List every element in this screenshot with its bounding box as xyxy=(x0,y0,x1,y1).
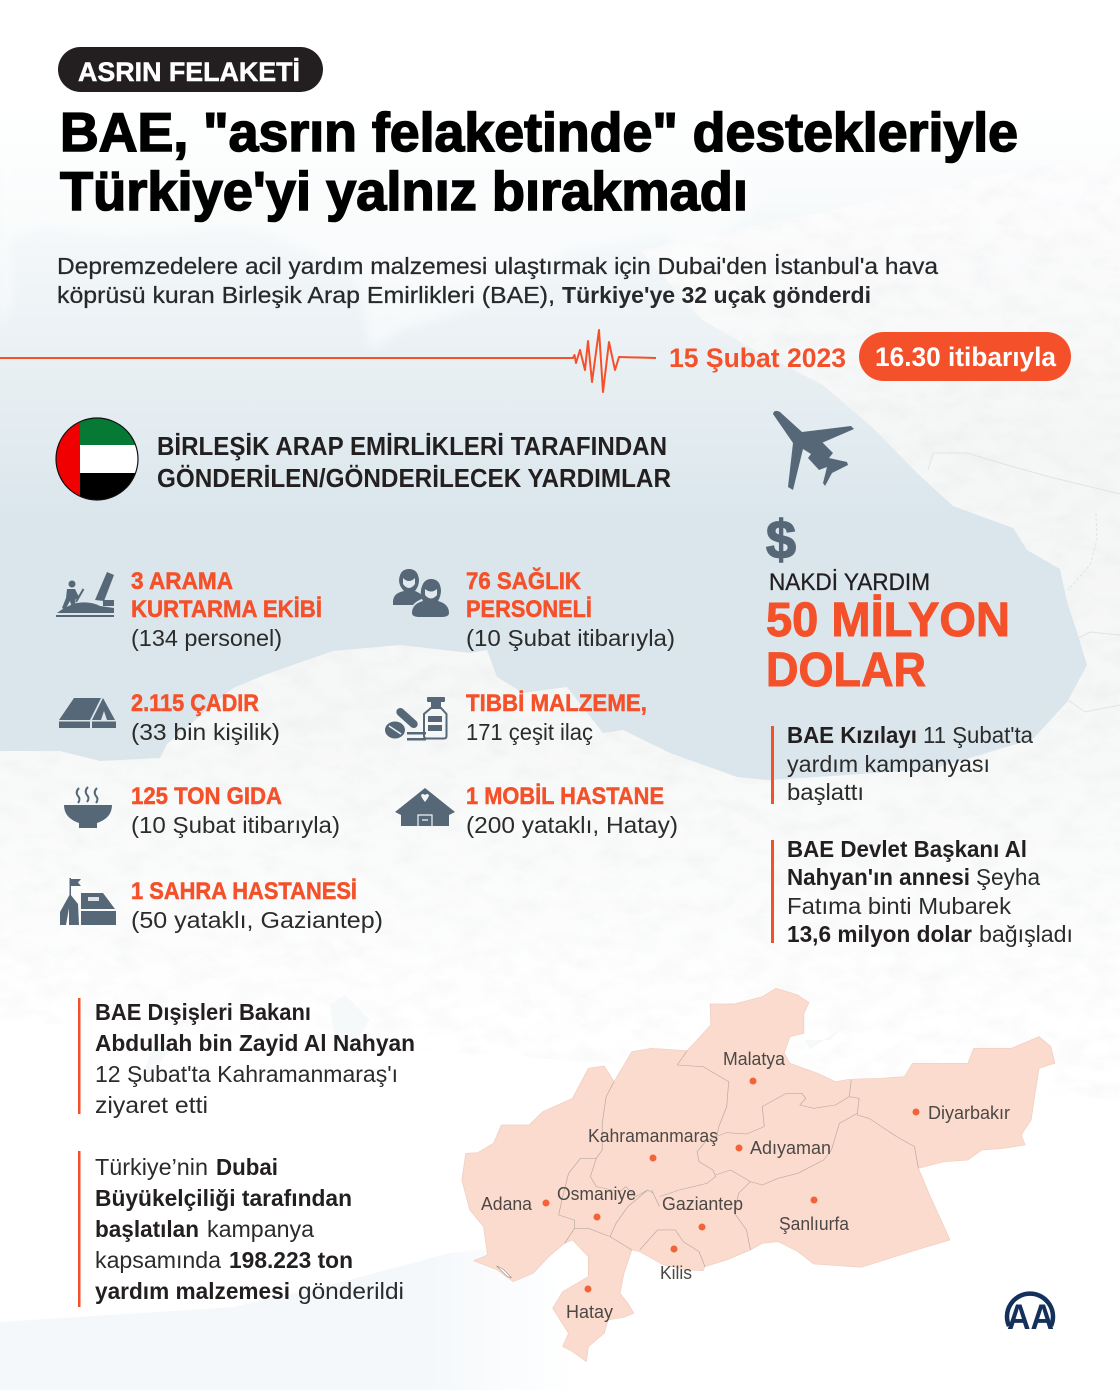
date: 15 Şubat 2023 xyxy=(669,343,846,373)
callout: Sheikha Fatima donation: Nahyan'ın annesi xyxy=(787,864,970,890)
province labels: Kahramanmaraş xyxy=(588,1126,718,1146)
callout: UAE Red Crescent xyxy=(771,722,1033,805)
province markers xyxy=(542,1078,920,1292)
text: health staff xyxy=(466,567,675,651)
text: mobile hospital xyxy=(466,783,678,838)
text: tents: 2.115 ÇADIR xyxy=(131,690,259,717)
province labels: Şanlıurfa xyxy=(779,1214,850,1234)
seismic line xyxy=(0,330,656,392)
callout: Sheikha Fatima donation: bağışladı xyxy=(979,921,1073,947)
section heading: GÖNDERİLEN/GÖNDERİLECEK YARDIMLAR xyxy=(157,463,671,493)
text: field hospital: (50 yataklı, Gaziantep) xyxy=(131,907,383,933)
intro text: Depremzedelere acil yardım malzemesi ulaştırmak için Dubai'den İstanbul'a hava xyxy=(57,253,938,279)
callout: Sheikha Fatima donation: Şeyha xyxy=(976,864,1040,890)
map: earthquake provinces xyxy=(462,988,1055,1362)
callout: foreign minister visit: BAE Dışişleri Bakanı xyxy=(95,999,311,1025)
text: tents xyxy=(131,690,280,745)
icon: field hospital xyxy=(60,878,116,925)
province labels: Hatay xyxy=(566,1302,613,1322)
callout: foreign minister visit: ziyaret etti xyxy=(95,1092,208,1118)
text: mobile hospital: 1 MOBİL HASTANE xyxy=(466,783,664,810)
province labels: Diyarbakır xyxy=(928,1103,1010,1123)
title: Türkiye'yi yalnız bırakmadı xyxy=(60,160,748,222)
title xyxy=(60,101,1018,222)
panel: cash aid xyxy=(766,569,1010,697)
callout: foreign minister visit: Abdullah bin Zayid Al Nahyan xyxy=(95,1030,415,1056)
province labels: Osmaniye xyxy=(557,1184,636,1204)
title: BAE, "asrın felaketinde" destekleriyle xyxy=(60,101,1018,163)
callout: Dubai consulate campaign: başlatılan xyxy=(95,1216,199,1242)
icon: UAE flag xyxy=(56,418,138,500)
intro text: köprüsü kuran Birleşik Arap Emirlikleri (BAE), xyxy=(57,282,555,308)
intro text xyxy=(57,253,938,308)
callout: Sheikha Fatima donation: 13,6 milyon dolar xyxy=(787,921,972,947)
text: health staff: (10 Şubat itibarıyla) xyxy=(466,625,675,651)
cash aid amount xyxy=(766,594,1010,697)
text: search and rescue: (134 personel) xyxy=(131,625,282,651)
province shapes xyxy=(462,988,1055,1362)
cash aid amount: 50 MİLYON xyxy=(766,594,1010,647)
province labels: Adana xyxy=(481,1194,533,1214)
icon: plane xyxy=(773,411,854,490)
text: health staff: 76 SAĞLIK xyxy=(466,567,582,595)
text: food xyxy=(131,783,340,838)
text: medical supplies xyxy=(466,690,647,745)
text: food: (10 Şubat itibarıyla) xyxy=(131,812,340,838)
callout: UAE Red Crescent: başlattı xyxy=(787,779,864,805)
logo: AA: AA xyxy=(1007,1298,1054,1337)
icon: dollar sign: $ xyxy=(766,510,796,570)
callout: Sheikha Fatima donation xyxy=(771,836,1073,947)
icon: rescue worker xyxy=(56,572,114,617)
time pill: 16.30 itibarıyla xyxy=(875,342,1057,372)
callout: UAE Red Crescent: yardım kampanyası xyxy=(787,751,990,777)
province labels: Adıyaman xyxy=(750,1138,831,1158)
callout: UAE Red Crescent: BAE Kızılayı xyxy=(787,722,917,748)
callout: Dubai consulate campaign: gönderildi xyxy=(298,1278,404,1304)
text: mobile hospital: (200 yataklı, Hatay) xyxy=(466,812,678,838)
callout: foreign minister visit xyxy=(78,998,415,1118)
text: medical supplies: 171 çeşit ilaç xyxy=(466,719,593,745)
province labels: Kilis xyxy=(660,1263,692,1283)
callout: Dubai consulate campaign: Dubai xyxy=(216,1154,278,1180)
kicker pill: ASRIN FELAKETİ xyxy=(78,57,300,87)
icon: doctors xyxy=(393,569,449,617)
section heading xyxy=(157,431,671,493)
callout: Dubai consulate campaign: Büyükelçiliği tarafından xyxy=(95,1185,352,1211)
item: health staff xyxy=(393,567,675,651)
text: medical supplies: TIBBİ MALZEME, xyxy=(466,690,647,717)
icon: mobile hospital xyxy=(395,788,455,827)
item: search and rescue xyxy=(56,568,322,651)
callout: Sheikha Fatima donation: BAE Devlet Başkanı Al xyxy=(787,836,1027,862)
item: field hospital xyxy=(60,878,383,933)
callout: Dubai consulate campaign: kapsamında xyxy=(95,1247,221,1273)
callout: Dubai consulate campaign: kampanya xyxy=(207,1216,314,1242)
cash aid amount: DOLAR xyxy=(766,644,926,697)
callout: Sheikha Fatima donation: Fatıma binti Mubarek xyxy=(787,893,1012,919)
province labels: Malatya xyxy=(723,1049,786,1069)
icon: tent xyxy=(59,698,116,728)
item: tents xyxy=(59,690,280,745)
text: health staff: PERSONELİ xyxy=(466,596,592,623)
callout: Dubai consulate campaign: Türkiye’nin xyxy=(95,1154,208,1180)
kicker pill xyxy=(58,47,323,92)
text: search and rescue: 3 ARAMA xyxy=(131,568,233,595)
text: search and rescue xyxy=(131,568,322,651)
callout: Dubai consulate campaign: 198.223 ton xyxy=(229,1247,353,1273)
callout: Dubai consulate campaign xyxy=(78,1151,404,1307)
text: tents: (33 bin kişilik) xyxy=(131,719,280,745)
province labels xyxy=(481,1049,1010,1322)
item: food xyxy=(64,783,340,838)
time pill xyxy=(859,332,1071,381)
icon: medicine xyxy=(385,697,446,740)
text: field hospital xyxy=(131,878,383,933)
text: food: 125 TON GIDA xyxy=(131,783,282,810)
icon: soup bowl xyxy=(64,787,112,828)
callout: Dubai consulate campaign: yardım malzemesi xyxy=(95,1278,290,1304)
callout: foreign minister visit: 12 Şubat'ta Kahramanmaraş'ı xyxy=(95,1061,398,1087)
text: field hospital: 1 SAHRA HASTANESİ xyxy=(131,878,357,905)
item: medical supplies xyxy=(385,690,647,745)
text: search and rescue: KURTARMA EKİBİ xyxy=(131,596,322,623)
panel: cash aid: NAKDİ YARDIM xyxy=(769,569,930,596)
panel: aid items xyxy=(56,567,678,933)
intro text: Türkiye'ye 32 uçak gönderdi xyxy=(562,282,871,308)
province labels: Gaziantep xyxy=(662,1194,743,1214)
item: mobile hospital xyxy=(395,783,678,838)
section heading: BİRLEŞİK ARAP EMİRLİKLERİ TARAFINDAN xyxy=(157,431,667,461)
callout: UAE Red Crescent: 11 Şubat'ta xyxy=(923,722,1033,748)
